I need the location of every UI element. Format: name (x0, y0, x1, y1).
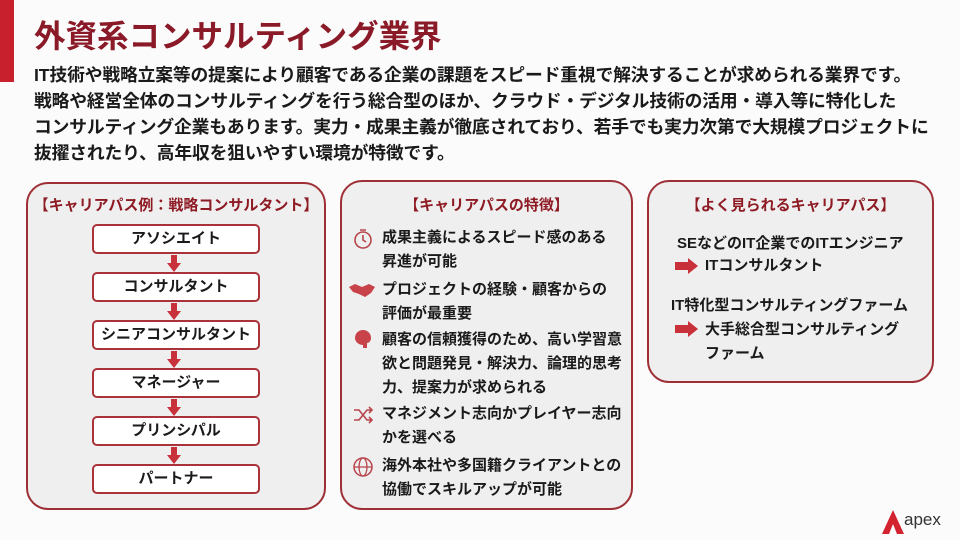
panel: career path features (340, 180, 633, 510)
intro text: 抜擢されたり、高年収を狙いやすい環境が特徴です。 (34, 143, 455, 163)
intro text (34, 65, 929, 163)
arrow 2 (675, 321, 698, 337)
item 2: プロジェクトの経験・顧客からの (382, 281, 607, 298)
item 5: 協働でスキルアップが可能 (382, 481, 562, 498)
path 2 target (705, 321, 899, 362)
icon: brain (355, 330, 371, 348)
arrow (167, 399, 181, 416)
item 3: 力、提案力が求められる (382, 379, 547, 396)
item 3: 欲と問題発見・解決力、論理的思考 (382, 355, 622, 372)
path 2 target: 大手総合型コンサルティング (705, 321, 899, 338)
icon: handshake (349, 284, 375, 297)
step: manager: マネージャー (132, 374, 220, 391)
item 5: 海外本社や多国籍クライアントとの (382, 457, 621, 474)
item 3: 顧客の信頼獲得のため、高い学習意 (382, 331, 622, 348)
path 2 target: ファーム (705, 345, 765, 362)
icon: globe (353, 457, 373, 477)
logo (882, 510, 941, 534)
accent bar (0, 0, 14, 82)
intro text: コンサルティング企業もあります。実力・成果主義が徹底されており、若手でも実力次第で大規模プロジェクトに (34, 117, 929, 137)
step: associate (92, 224, 260, 254)
step: partner (92, 464, 260, 494)
item 1: 成果主義によるスピード感のある (382, 229, 607, 246)
arrow (167, 447, 181, 464)
path 1: SEなどのIT企業でのITエンジニア (677, 235, 904, 252)
title: 外資系コンサルティング業界 (34, 18, 442, 54)
panel heading: 【キャリアパス例：戦略コンサルタント】 (34, 197, 318, 214)
arrow (167, 255, 181, 272)
panel heading: 【よく見られるキャリアパス】 (686, 197, 895, 214)
item 1: 昇進が可能 (382, 253, 457, 270)
step: principal (92, 416, 260, 446)
step: associate: アソシエイト (131, 230, 221, 247)
logo: apex (904, 510, 941, 529)
item 4: マネジメント志向かプレイヤー志向 (382, 405, 622, 422)
icon: stopwatch (354, 229, 372, 249)
arrow (167, 303, 181, 320)
path 2: IT特化型コンサルティングファーム (671, 297, 908, 314)
panel: common career paths (647, 180, 934, 383)
item 4 (382, 405, 622, 446)
step: partner: パートナー (138, 470, 214, 487)
step: senior consultant (92, 320, 260, 350)
item 1 (382, 229, 607, 270)
arrow 1 (675, 258, 698, 274)
step: senior consultant: シニアコンサルタント (101, 326, 251, 343)
panel: career path example (26, 182, 326, 510)
step: manager (92, 368, 260, 398)
item 4: かを選べる (382, 429, 457, 446)
item 5 (382, 457, 621, 498)
step: consultant (92, 272, 260, 302)
item 2 (382, 281, 607, 322)
item 2: 評価が最重要 (382, 305, 472, 322)
intro text: 戦略や経営全体のコンサルティングを行う総合型のほか、クラウド・デジタル技術の活用・導入等に特化した (34, 91, 896, 111)
icon: shuffle (354, 406, 373, 424)
intro text: IT技術や戦略立案等の提案により顧客である企業の課題をスピード重視で解決することが求められる業界です。 (34, 65, 911, 85)
arrow (167, 351, 181, 368)
item 3 (382, 331, 622, 396)
step: principal: プリンシパル (131, 422, 221, 439)
panel heading: 【キャリアパスの特徴】 (404, 197, 569, 214)
step: consultant: コンサルタント (123, 278, 228, 295)
path 1 target: ITコンサルタント (705, 257, 823, 274)
